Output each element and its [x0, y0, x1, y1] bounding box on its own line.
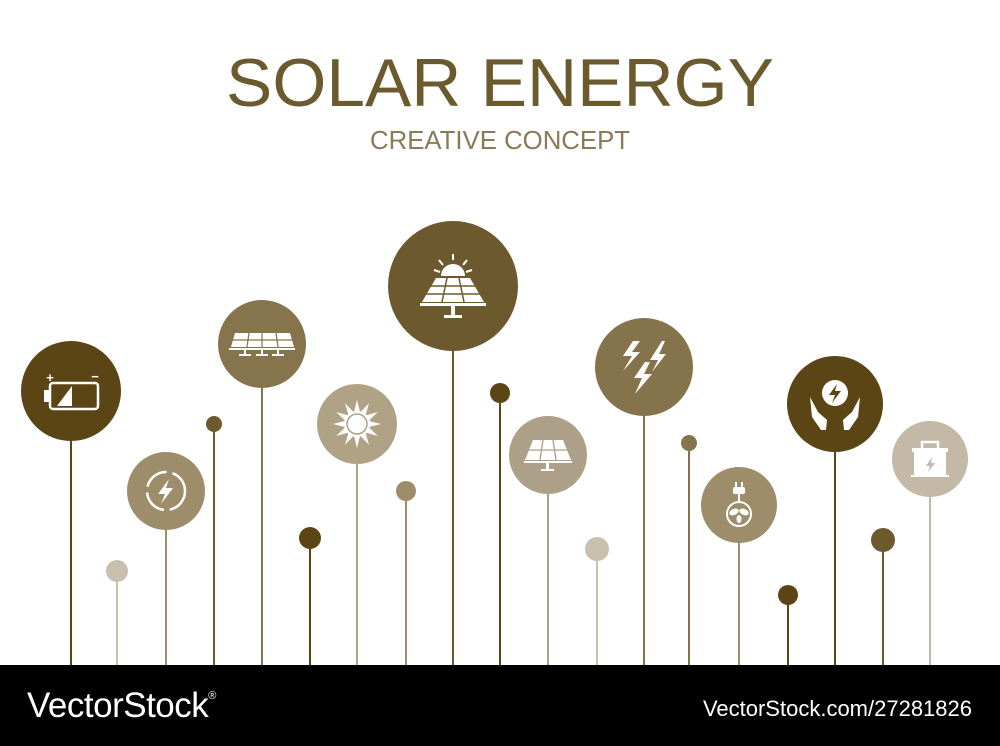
icon: lightning [595, 318, 693, 416]
icon: big solar panel with sun [388, 221, 518, 351]
stems [71, 286, 930, 665]
icon: car battery [892, 421, 968, 497]
subtitle: CREATIVE CONCEPT [370, 125, 630, 155]
title: SOLAR ENERGY [226, 45, 774, 121]
icon: sun [317, 384, 397, 464]
footer url: VectorStock.com/27281826 [703, 696, 972, 721]
dots [106, 383, 895, 605]
icon: solar panels [218, 300, 306, 388]
footer logo: ® [208, 690, 216, 702]
footer bar [0, 665, 1000, 746]
icon: battery: − [91, 369, 99, 384]
icon: hands holding energy [787, 356, 883, 452]
icon: battery: + [46, 370, 54, 385]
icon: battery [21, 341, 121, 441]
icon: solar panel [509, 416, 587, 494]
footer logo: VectorStock [27, 686, 208, 725]
icon: recycle energy [127, 452, 205, 530]
icon: eco plug [701, 467, 777, 543]
